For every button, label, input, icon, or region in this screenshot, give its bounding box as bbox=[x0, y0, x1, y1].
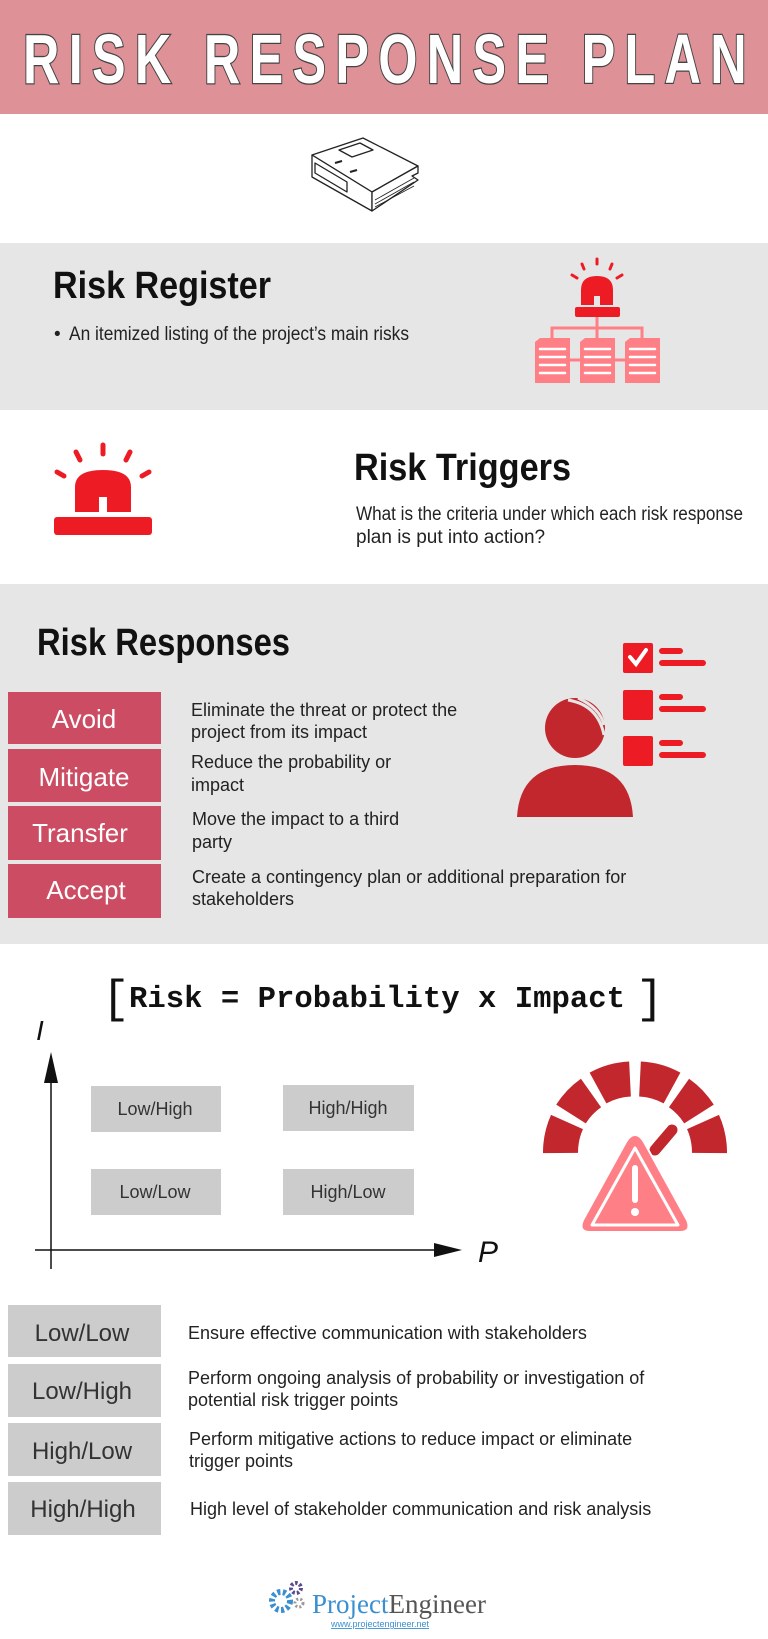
icon: person with checklist bbox=[517, 643, 703, 817]
response: avoid: project from its impact bbox=[191, 722, 367, 742]
logo: project engineer bbox=[272, 1583, 486, 1629]
response: avoid: Avoid bbox=[52, 704, 116, 734]
chart: probability impact matrix bbox=[35, 1015, 498, 1269]
quadrant: low/low: Low/Low bbox=[119, 1182, 192, 1202]
response: transfer: party bbox=[192, 832, 232, 852]
formula: ] bbox=[636, 974, 664, 1026]
heading: risk register: Risk Register bbox=[53, 265, 271, 307]
legend: high/high: High level of stakeholder communication and risk analysis bbox=[190, 1499, 651, 1519]
header banner bbox=[0, 0, 768, 114]
legend: low/high: potential risk trigger points bbox=[188, 1390, 398, 1410]
legend: high/high: High/High bbox=[30, 1496, 136, 1523]
axis label: I: I bbox=[36, 1015, 44, 1046]
icon: binder bbox=[312, 138, 418, 211]
legend: low/high: Low/High bbox=[32, 1378, 132, 1405]
response: mitigate bbox=[8, 749, 391, 802]
quadrant: high/high: High/High bbox=[308, 1098, 388, 1118]
response: accept: Create a contingency plan or additional preparation for bbox=[192, 867, 626, 887]
formula: Risk = Probability x Impact bbox=[129, 982, 625, 1017]
legend: high/high bbox=[8, 1482, 651, 1535]
icon: gauge warning bbox=[560, 1079, 710, 1232]
response: avoid: Eliminate the threat or protect the bbox=[191, 700, 457, 720]
logo: project engineer: www.projectengineer.net bbox=[330, 1619, 430, 1629]
response: mitigate: Mitigate bbox=[38, 762, 130, 792]
response: mitigate: impact bbox=[191, 775, 244, 795]
legend: high/low bbox=[8, 1423, 632, 1476]
legend: low/low: Low/Low bbox=[35, 1320, 130, 1347]
legend: low/low bbox=[8, 1305, 587, 1357]
heading: risk responses: Risk Responses bbox=[37, 622, 290, 664]
response: transfer: Move the impact to a third bbox=[192, 809, 399, 829]
axis label: P: P bbox=[478, 1236, 498, 1269]
response: avoid bbox=[8, 692, 457, 744]
quadrant: high/low: High/Low bbox=[310, 1182, 387, 1202]
quadrant: low/high: Low/High bbox=[117, 1099, 193, 1119]
quadrant: high/high bbox=[283, 1085, 414, 1131]
text: register bullet: An itemized listing of the project’s main risks bbox=[69, 324, 409, 345]
legend: high/low: High/Low bbox=[32, 1438, 133, 1465]
legend: low/low: Ensure effective communication with stakeholders bbox=[188, 1323, 587, 1343]
response: accept: Accept bbox=[46, 875, 127, 905]
legend: high/low: trigger points bbox=[189, 1451, 293, 1471]
response: accept: stakeholders bbox=[192, 889, 294, 909]
quadrant: high/low bbox=[283, 1169, 414, 1215]
response: mitigate: Reduce the probability or bbox=[191, 752, 391, 772]
panel: risk responses bbox=[0, 584, 768, 944]
logo: project engineer: ProjectEngineer bbox=[312, 1589, 486, 1619]
response: transfer: Transfer bbox=[32, 818, 128, 848]
icon: siren with documents bbox=[535, 259, 660, 383]
text: triggers description: plan is put into action? bbox=[356, 527, 545, 548]
title: RISK RESPONSE PLAN bbox=[23, 20, 747, 98]
response: accept bbox=[8, 864, 626, 918]
legend: low/high: Perform ongoing analysis of probability or investigation of bbox=[188, 1368, 645, 1388]
legend: low/high bbox=[8, 1364, 645, 1417]
text: register bullet: • bbox=[54, 324, 61, 345]
formula bbox=[102, 974, 664, 1026]
heading: risk triggers: Risk Triggers bbox=[354, 447, 571, 489]
response: transfer bbox=[8, 806, 399, 860]
panel: risk register bbox=[0, 243, 768, 410]
formula: [ bbox=[102, 974, 130, 1026]
quadrant: low/high bbox=[91, 1086, 221, 1132]
legend: high/low: Perform mitigative actions to reduce impact or eliminate bbox=[189, 1429, 632, 1449]
quadrant: low/low bbox=[91, 1169, 221, 1215]
icon: siren bbox=[54, 445, 152, 535]
